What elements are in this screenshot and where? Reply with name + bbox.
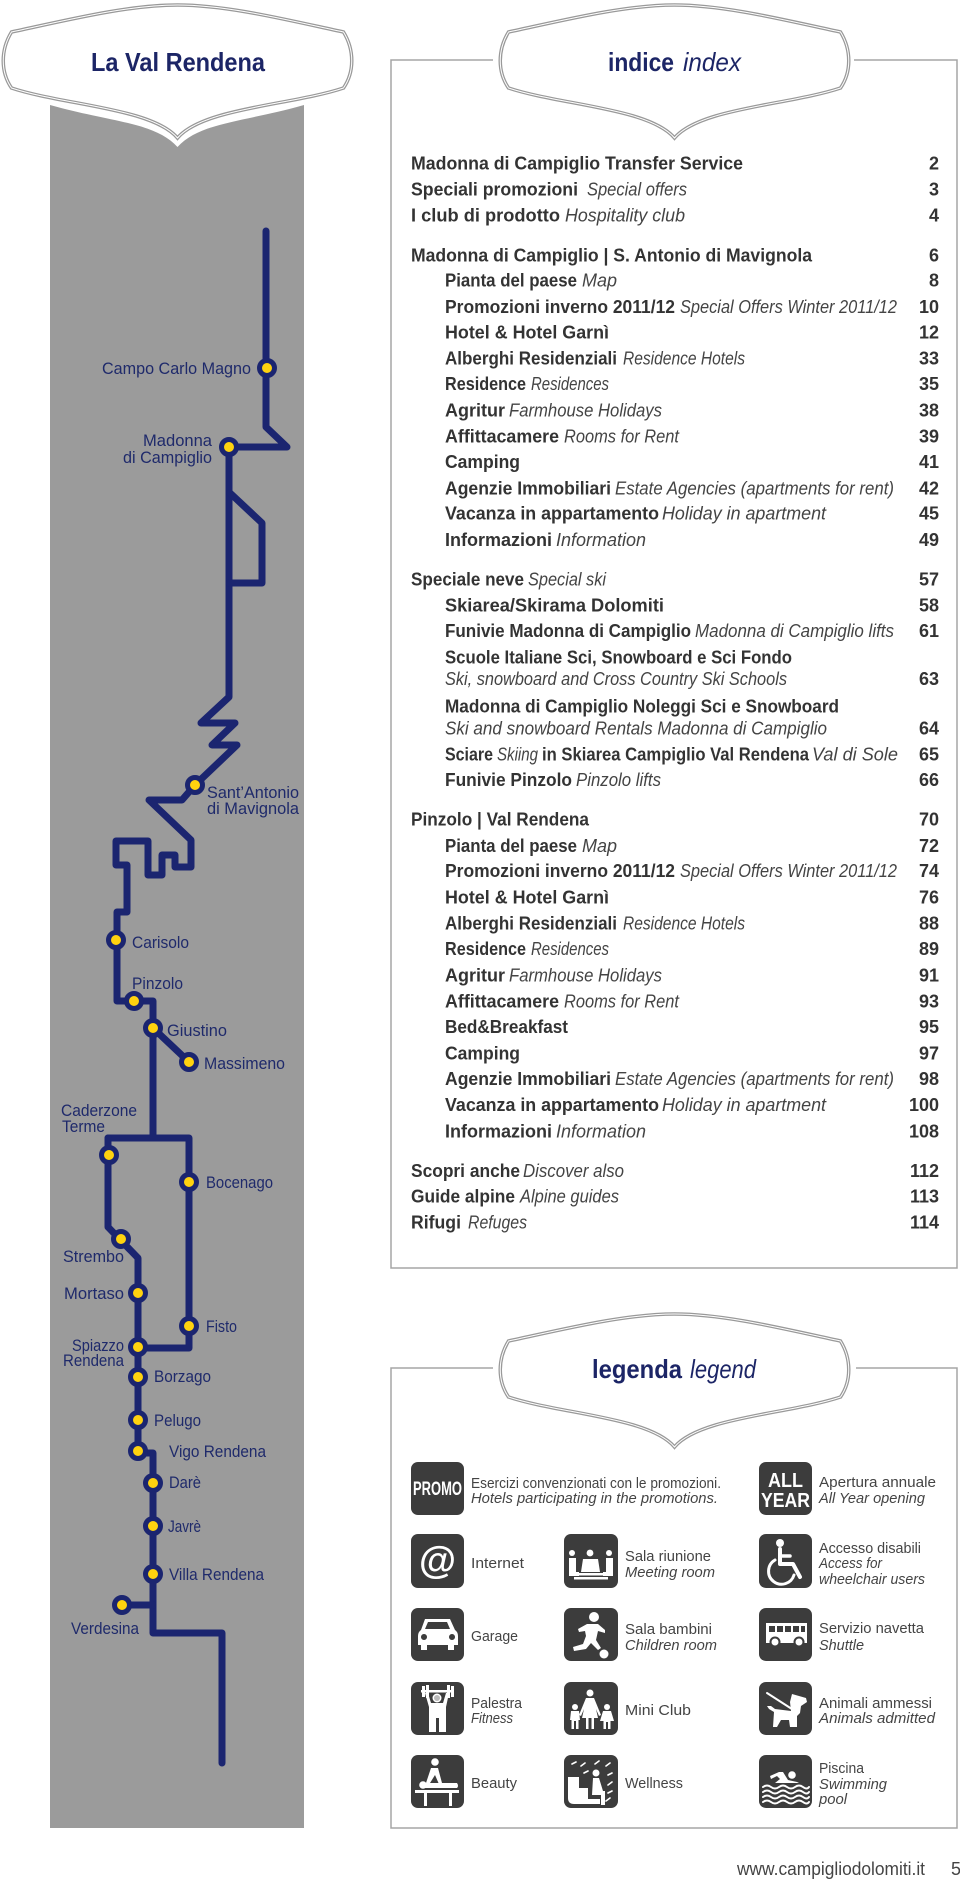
place labels: Madonna [143,431,213,450]
index group: Speciale neve: 63 [919,669,939,689]
index group: Madonna di Campiglio: Map [582,270,617,290]
legend item: fitness [411,1682,523,1735]
index group: Pinzolo: 70 [919,809,939,829]
index group: general: 4 [929,205,939,225]
index group: Pinzolo: Residence [445,939,526,959]
place labels: Mortaso [64,1284,124,1303]
legend item: swimming pool: Swimming [819,1776,888,1793]
index group: Madonna di Campiglio: Affittacamere [445,426,559,446]
index group: Pinzolo: 95 [919,1017,939,1037]
index group: Pinzolo: Pianta del paese [445,836,577,856]
legend item: fitness: Fitness [471,1710,513,1727]
place labels: Campo Carlo Magno [102,359,251,378]
index group: Speciale neve: 66 [919,770,939,790]
place labels: Strembo [63,1247,124,1266]
place labels: Borzago [154,1367,211,1386]
legend item: all year: YEAR [761,1490,810,1512]
map background [50,105,304,1828]
index group: Madonna di Campiglio: 33 [919,348,939,368]
index group: Speciale neve: 65 [919,744,939,764]
legend item: animals admitted: Animals admitted [818,1710,936,1727]
index group: Madonna di Campiglio: 41 [919,452,939,472]
index group: Madonna di Campiglio: 6 [929,245,939,265]
heading badge: indice index [500,5,849,138]
index group: Speciale neve: 58 [919,595,939,615]
index group: Pinzolo: Agritur [445,965,505,985]
index group: other: Rifugi [411,1212,461,1232]
place labels: Javrè [168,1517,201,1536]
index group: Pinzolo: 89 [919,939,939,959]
legend item: wheelchair access: wheelchair users [819,1571,925,1588]
index group: Pinzolo: Pinzolo | Val Rendena [411,809,590,829]
index group: Pinzolo: 98 [919,1069,939,1089]
heading badge: La Val Rendena: La Val Rendena [91,47,265,77]
legend item: wheelchair access: Access for [818,1555,883,1572]
index group: Pinzolo: Holiday in apartment [662,1095,827,1115]
index group: Madonna di Campiglio: Rooms for Rent [564,426,680,446]
place labels: Terme [62,1117,105,1136]
legend item: promo: Hotels participating in the promotions. [471,1490,718,1507]
index group: Pinzolo: 108 [909,1121,939,1141]
legend item: all year: ALL [768,1470,803,1492]
index group: Pinzolo: Agenzie Immobiliari [445,1069,611,1089]
index group: Madonna di Campiglio: Vacanza in appartamento [445,503,659,523]
legend item: internet: @ [419,1540,456,1582]
index group: Madonna di Campiglio [411,245,939,550]
legend item: shuttle: Servizio navetta [819,1620,925,1637]
place labels: Fisto [206,1317,237,1336]
index group: other: Guide alpine [411,1186,515,1206]
legend item: wellness: Wellness [625,1775,683,1792]
place labels: Villa Rendena [169,1565,264,1584]
index group: Speciale neve: Scuole Italiane Sci, Snowboard e Sci Fondo [445,647,792,667]
index group: other: Refuges [468,1212,527,1232]
legend item: mini club: Mini Club [625,1702,691,1719]
index group: Speciale neve: 61 [919,621,939,641]
legend item: beauty [411,1755,517,1808]
index group: Speciale neve [411,569,939,790]
panel: legend [391,1314,957,1828]
index group: Pinzolo: Informazioni [445,1121,552,1141]
legend item: mini club [564,1682,691,1735]
place labels: Pinzolo [132,974,183,993]
index group: Pinzolo: Residence Hotels [623,913,745,933]
index group: Madonna di Campiglio: Agritur [445,400,505,420]
index group: Pinzolo: Estate Agencies (apartments for rent) [615,1069,894,1089]
panel: La Val Rendena map [50,105,304,1828]
index group: Madonna di Campiglio: Residence Hotels [623,348,745,368]
index group: Pinzolo: Hotel & Hotel Garnì [445,887,609,907]
panel: index [391,5,957,1268]
legend item: wheelchair access: Accesso disabili [819,1540,921,1557]
index group: Speciale neve: Ski, snowboard and Cross Country Ski Schools [445,669,787,689]
index group: Pinzolo: 72 [919,836,939,856]
index group: Speciale neve: Ski and snowboard Rentals Madonna di Campiglio [445,718,827,738]
legend item: meeting room [564,1534,715,1588]
index group: Madonna di Campiglio: Holiday in apartment [662,503,827,523]
index group: Madonna di Campiglio: Pianta del paese [445,270,577,290]
index group: Speciale neve: Skiing [497,744,538,764]
index group: Madonna di Campiglio: Residence [445,374,526,394]
legend item: internet: Internet [471,1555,525,1572]
index group: other: 114 [910,1212,939,1232]
index group: other: 113 [910,1186,939,1206]
index group: Madonna di Campiglio: 45 [919,503,939,523]
index group: general [411,153,939,225]
index group: Speciale neve: in Skiarea Campiglio Val Rendena [542,744,810,764]
heading badge: legenda legend: legenda [592,1354,682,1384]
index group: Madonna di Campiglio: Camping [445,452,520,472]
index group: Pinzolo: Information [556,1121,646,1141]
index group: Madonna di Campiglio: Farmhouse Holidays [509,400,662,420]
index group: Pinzolo: 91 [919,965,939,985]
index group: Madonna di Campiglio: Madonna di Campiglio | S. Antonio di Mavignola [411,245,813,265]
legend item: beauty: Beauty [471,1775,517,1792]
legend item: fitness: Palestra [471,1695,523,1712]
route network [108,231,287,1763]
index group: general: I club di prodotto [411,205,560,225]
index group: Pinzolo: Camping [445,1043,520,1063]
index group: Madonna di Campiglio: Residences [531,374,609,394]
place labels: di Campiglio [123,448,212,467]
index group: Madonna di Campiglio: 38 [919,400,939,420]
legend item: garage [411,1608,518,1661]
index group: Madonna di Campiglio: 12 [919,322,939,342]
heading badge: legenda legend: legend [690,1354,757,1384]
index group: Speciale neve: Special ski [528,569,607,589]
legend item: animals admitted [759,1682,936,1735]
index group: Madonna di Campiglio: 42 [919,478,939,498]
index group: other [411,1161,939,1232]
legend item: wellness [564,1755,683,1808]
index group: Pinzolo: Promozioni inverno 2011/12 [445,861,675,881]
legend item: promo [411,1462,721,1515]
index group: Pinzolo: 97 [919,1043,939,1063]
legend item: all year: All Year opening [818,1490,926,1507]
place labels: Bocenago [206,1173,273,1192]
place labels: Sant’Antonio [207,783,299,802]
heading badge: La Val Rendena [3,5,352,138]
legend item: promo: PROMO [413,1479,462,1500]
place labels: Verdesina [71,1619,139,1638]
index group: Speciale neve: 64 [919,718,939,738]
index group: Speciale neve: Pinzolo lifts [576,770,661,790]
legend item: promo: Esercizi convenzionati con le promozioni. [471,1475,721,1492]
place labels: Massimeno [204,1054,285,1073]
index group: Madonna di Campiglio: 39 [919,426,939,446]
place labels: Carisolo [132,933,189,952]
legend item: children room: Sala bambini [625,1621,712,1638]
index group: general: 2 [929,153,939,173]
index group: Madonna di Campiglio: Alberghi Residenziali [445,348,617,368]
index group: other: Scopri anche [411,1161,520,1181]
index group: general: Madonna di Campiglio Transfer Service [411,153,743,173]
heading badge: indice index: index [683,47,742,77]
index group: Pinzolo: 88 [919,913,939,933]
index group: Pinzolo: Special Offers Winter 2011/12 [680,861,897,881]
legend item: garage: Garage [471,1628,518,1645]
index group: Pinzolo: Map [582,836,617,856]
index group: other: Discover also [523,1161,624,1181]
index group: Speciale neve: Speciale neve [411,569,524,589]
legend item: all year: Apertura annuale [819,1474,936,1491]
index group: Madonna di Campiglio: Promozioni inverno 2011/12 [445,297,675,317]
index group: Madonna di Campiglio: 49 [919,530,939,550]
index group: Speciale neve: 57 [919,569,939,589]
legend item: meeting room: Sala riunione [625,1548,711,1565]
index group: Speciale neve: Funivie Pinzolo [445,770,572,790]
index group: other: Alpine guides [519,1186,619,1206]
place labels: Caderzone [61,1101,137,1120]
index group: Speciale neve: Funivie Madonna di Campiglio [445,621,691,641]
heading badge: indice index: indice [608,47,674,77]
index group: Madonna di Campiglio: Special Offers Winter 2011/12 [680,297,897,317]
place labels: Vigo Rendena [169,1442,266,1461]
index frame [391,60,957,1268]
index group: Pinzolo: Bed&Breakfast [445,1017,568,1037]
index group: Speciale neve: Sciare [445,744,493,764]
legend item: shuttle [759,1608,925,1661]
index group: Pinzolo: 93 [919,991,939,1011]
legend item: children room [564,1608,717,1661]
legend frame [391,1368,957,1828]
index group: Pinzolo: Vacanza in appartamento [445,1095,659,1115]
index group: Madonna di Campiglio: Estate Agencies (apartments for rent) [615,478,894,498]
index group: general: Speciali promozioni [411,179,578,199]
legend item: swimming pool [759,1755,888,1808]
place labels: Giustino [167,1021,227,1040]
place labels: Pelugo [154,1411,201,1430]
footer: website and page number: www.campigliodolomiti.it [736,1859,925,1879]
index group: Madonna di Campiglio: 8 [929,270,939,290]
index group: Pinzolo: 74 [919,861,939,881]
place labels: Spiazzo [72,1336,124,1355]
index group: Pinzolo: Alberghi Residenziali [445,913,617,933]
index group: general: 3 [929,179,939,199]
legend item: internet [411,1534,525,1588]
place labels: Rendena [63,1351,124,1370]
index group: general: Hospitality club [565,205,685,225]
place labels [61,359,300,1638]
index group: Madonna di Campiglio: 10 [919,297,939,317]
stops [102,360,274,1612]
legend item: meeting room: Meeting room [625,1564,715,1581]
index group: Madonna di Campiglio: 35 [919,374,939,394]
index group: Pinzolo: Residences [531,939,609,959]
index group: Pinzolo: 100 [909,1095,939,1115]
legend item: swimming pool: pool [818,1791,848,1808]
index group: other: 112 [910,1161,939,1181]
legend item: animals admitted: Animali ammessi [819,1695,932,1712]
index group: Pinzolo: Farmhouse Holidays [509,965,662,985]
index group: Speciale neve: Madonna di Campiglio Noleggi Sci e Snowboard [445,696,839,716]
index group: Pinzolo [411,809,939,1141]
place labels: di Mavignola [207,799,300,818]
index group: Speciale neve: Skiarea/Skirama Dolomiti [445,595,664,615]
index group: Speciale neve: Madonna di Campiglio lifts [695,621,894,641]
legend item: swimming pool: Piscina [819,1760,865,1777]
place labels: Darè [169,1473,201,1492]
index group: Madonna di Campiglio: Information [556,530,646,550]
index group: general: Special offers [587,179,687,199]
index group: Madonna di Campiglio: Agenzie Immobiliari [445,478,611,498]
index group: Madonna di Campiglio: Hotel & Hotel Garnì [445,322,609,342]
legend item: children room: Children room [625,1637,717,1654]
index group: Pinzolo: 76 [919,887,939,907]
index group: Pinzolo: Affittacamere [445,991,559,1011]
heading badge: legenda legend [500,1314,849,1447]
legend item: all year [759,1462,936,1515]
legend item: shuttle: Shuttle [819,1637,864,1654]
legend item: wheelchair access [759,1534,925,1588]
index group: Speciale neve: Val di Sole [812,744,898,764]
index group: Madonna di Campiglio: Informazioni [445,530,552,550]
index group: Pinzolo: Rooms for Rent [564,991,680,1011]
